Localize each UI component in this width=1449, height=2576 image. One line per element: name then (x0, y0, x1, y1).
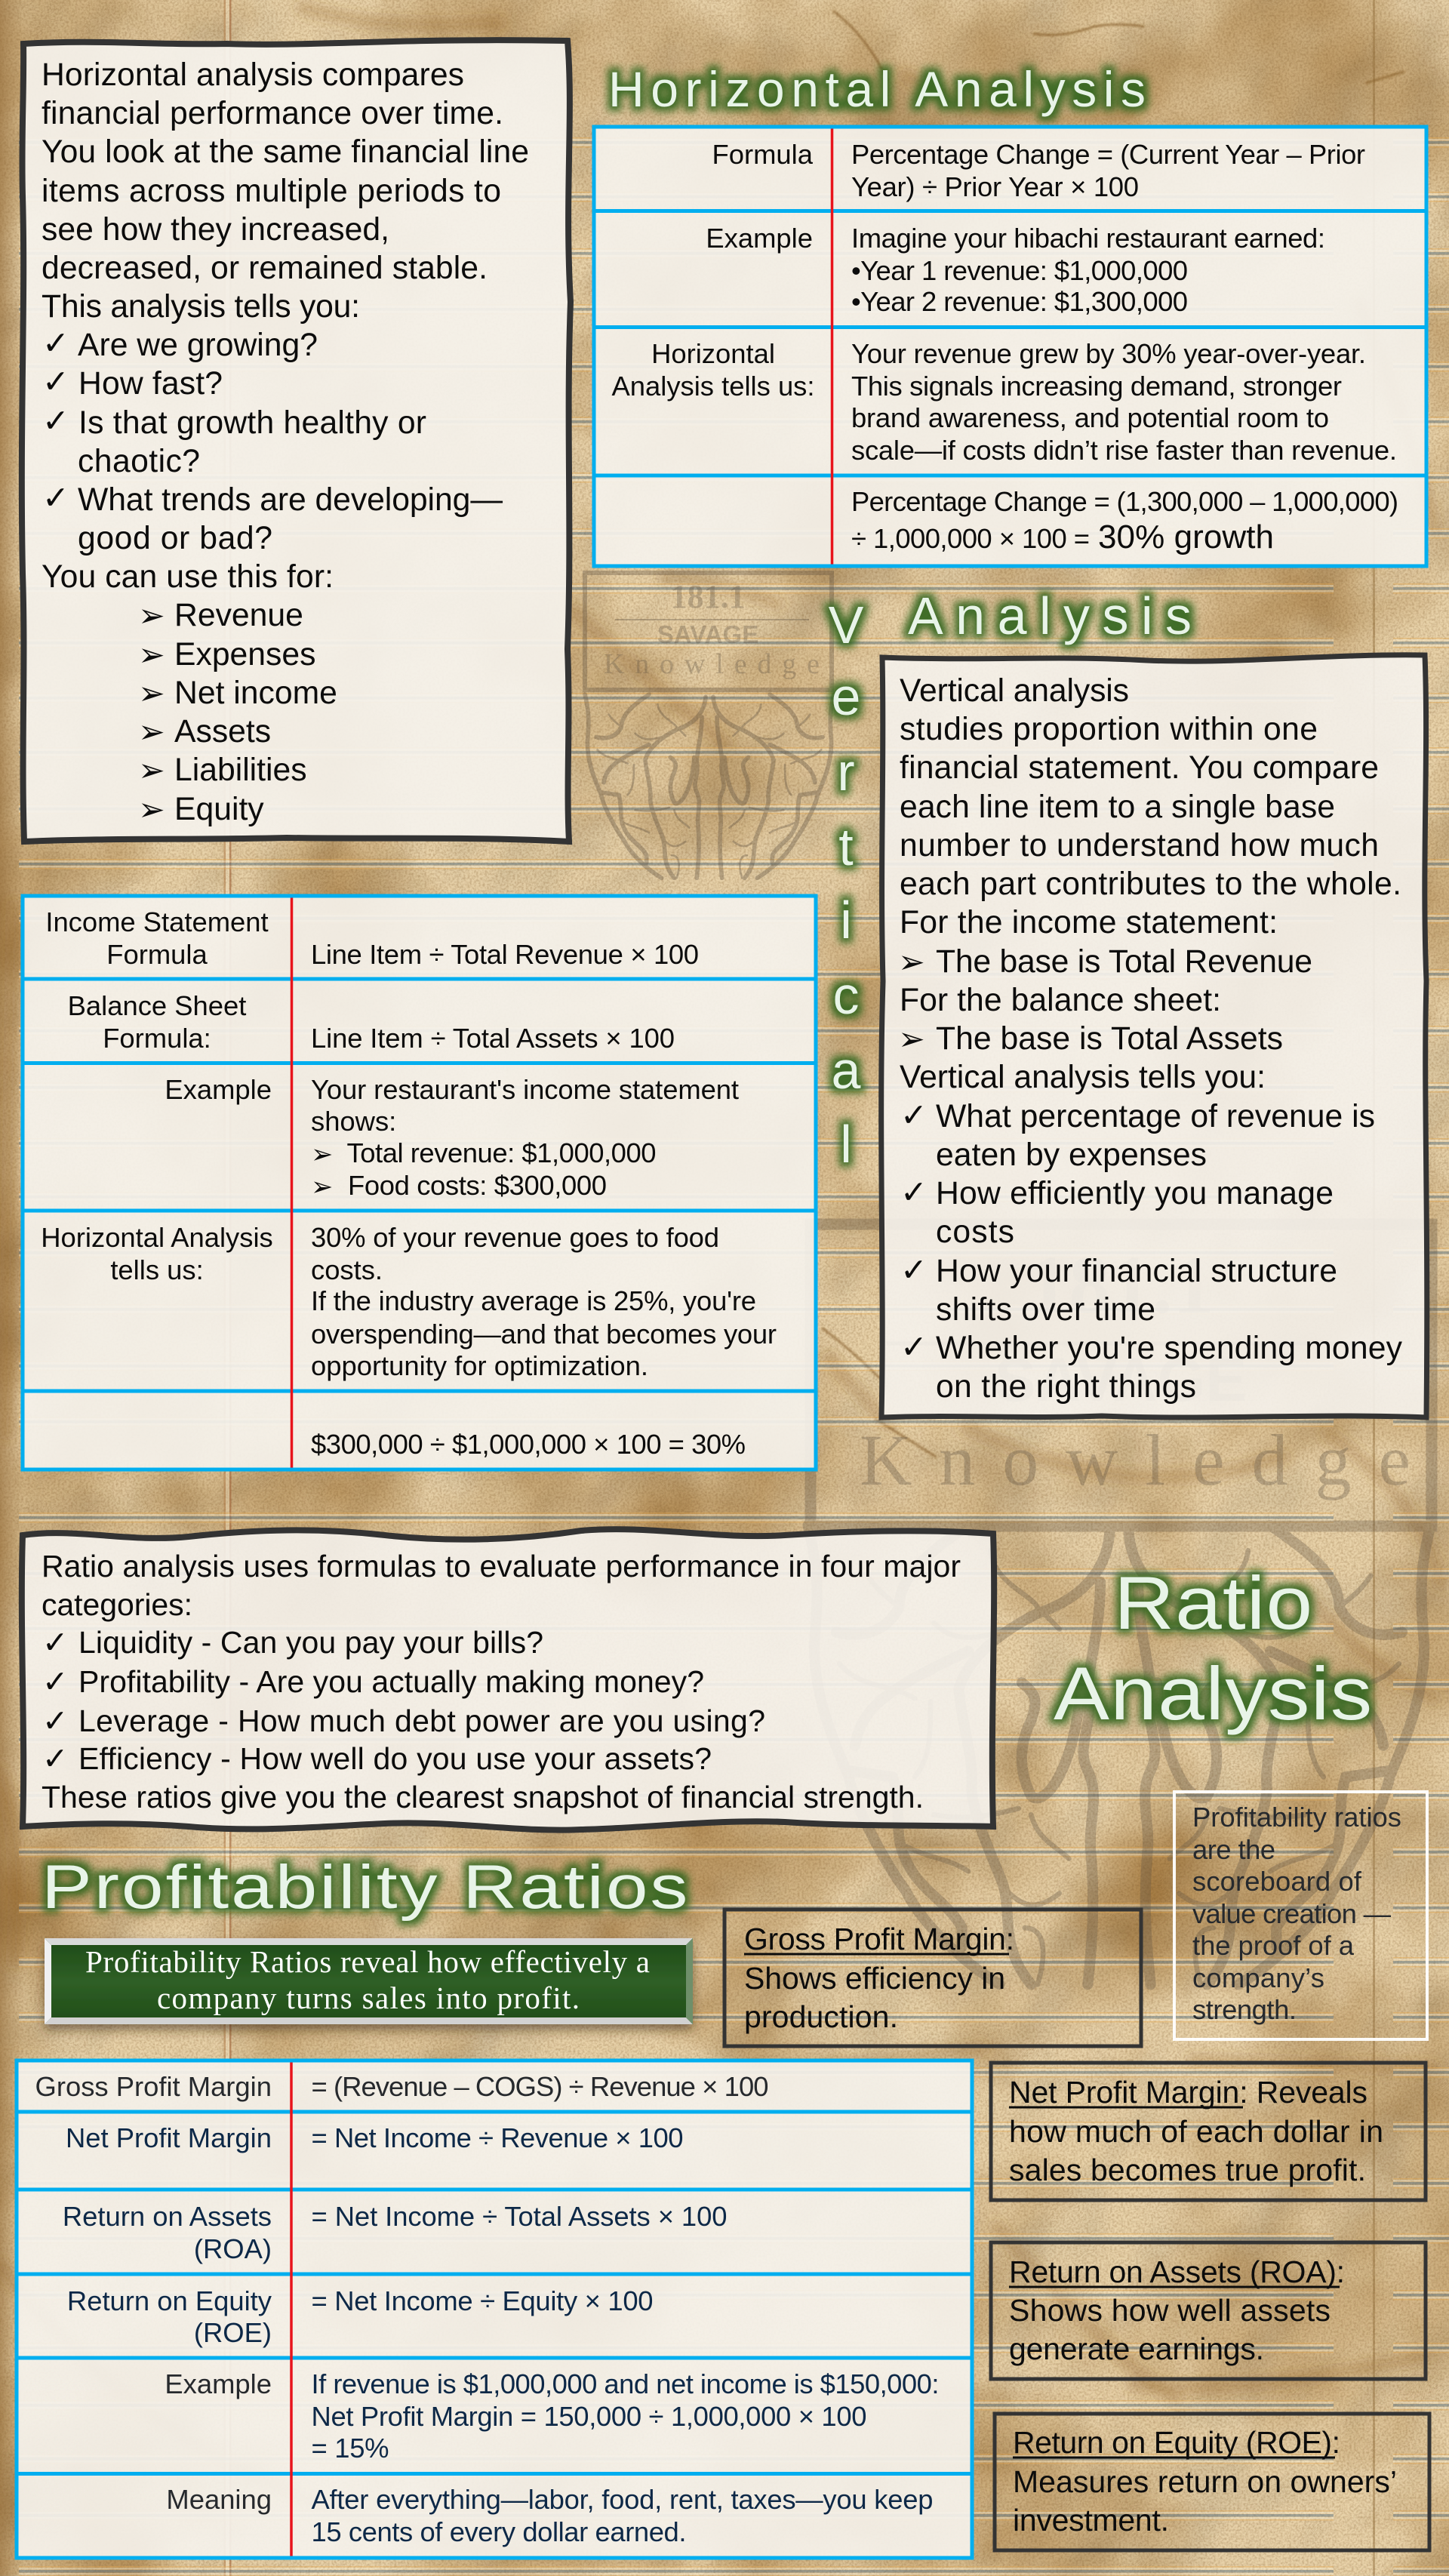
table: horizontal analysis: Example (706, 223, 813, 254)
table: vertical analysis: Formula (106, 939, 208, 970)
panel: horizontal analysis intro: decreased, or remained stable. (42, 250, 488, 286)
table: profitability ratio formulas: If revenue is $1,000,000 and net income is $150,000: (311, 2368, 939, 2399)
heading: vertical analysis (stacked letters): c (833, 966, 859, 1025)
table: vertical analysis: Income Statement (45, 906, 269, 937)
heading: ratio analysis (1054, 1562, 1372, 1736)
watermark: large savage knowledge logo: 181.1 (1027, 1239, 1214, 1331)
panel: vertical analysis text: on the right things (936, 1368, 1196, 1405)
table: vertical analysis: ➢ (311, 1140, 333, 1170)
callout: profitability ratios scoreboard: the proof of a (1192, 1930, 1355, 1961)
table: vertical analysis: ➢ (311, 1172, 333, 1202)
panel: vertical analysis text: Whether you're spending money (936, 1330, 1403, 1366)
panel: horizontal analysis intro: items across multiple periods to (42, 173, 501, 209)
watermark: small savage knowledge logo (585, 573, 834, 878)
panel: ratio analysis text: Efficiency - How well do you use your assets? (78, 1741, 712, 1776)
panel: vertical analysis text: Vertical analysis (900, 672, 1129, 709)
panel: vertical analysis text: The base is Total Revenue (936, 943, 1312, 980)
table: vertical analysis: 30% of your revenue goes to food (311, 1222, 719, 1253)
panel: horizontal analysis intro: good or bad? (78, 520, 272, 556)
panel: horizontal analysis intro: ✓ (42, 363, 69, 401)
panel: vertical analysis text: each line item to a single base (900, 789, 1335, 825)
panel: vertical analysis text: For the income statement: (900, 904, 1278, 940)
table: horizontal analysis: ÷ 1,000,000 × 100 = (851, 523, 1090, 554)
table: horizontal analysis: Year) ÷ Prior Year × 100 (851, 171, 1139, 202)
panel: ratio analysis text: Liquidity - Can you pay your bills? (78, 1625, 543, 1660)
table: vertical analysis: shows: (311, 1106, 396, 1137)
panel: horizontal analysis intro: Equity (174, 791, 264, 827)
panel: horizontal analysis intro (22, 40, 571, 842)
table: profitability ratio formulas: Return on Assets (63, 2201, 272, 2232)
table: horizontal analysis: Imagine your hibachi restaurant earned: (851, 223, 1325, 254)
table: profitability ratio formulas: = 15% (311, 2433, 389, 2464)
panel: horizontal analysis intro: Assets (174, 713, 271, 749)
panel: ratio analysis text: ✓ (42, 1624, 68, 1660)
table: vertical analysis: Horizontal Analysis (41, 1222, 273, 1253)
panel: ratio analysis text: categories: (42, 1587, 192, 1622)
heading: vertical analysis (stacked letters): a (832, 1041, 861, 1100)
table: vertical analysis: Your restaurant's income statement (311, 1074, 739, 1105)
panel: vertical analysis text (881, 655, 1427, 1417)
callout: return on equity (995, 2414, 1429, 2550)
table: vertical analysis: costs. (311, 1254, 383, 1285)
panel: horizontal analysis intro: see how they increased, (42, 211, 389, 248)
table: vertical analysis: opportunity for optimization. (311, 1350, 648, 1381)
panel: vertical analysis text: ➢ (898, 943, 925, 981)
panel: vertical analysis text: The base is Total Assets (936, 1020, 1283, 1057)
panel: vertical analysis text: studies proportion within one (900, 711, 1318, 747)
panel: ratio analysis text: Ratio analysis uses formulas to evaluate performance in four major (42, 1549, 961, 1583)
callout: return on equity: Return on Equity (ROE): (1013, 2425, 1340, 2460)
panel: horizontal analysis intro: Liabilities (174, 752, 307, 788)
callout: return on assets: Return on Assets (ROA): (1009, 2254, 1345, 2289)
callout: net profit margin: Net Profit Margin: Reveals (1009, 2075, 1367, 2110)
table: horizontal analysis: scale—if costs didn’t rise faster than revenue. (851, 435, 1397, 466)
callout: return on assets (991, 2242, 1426, 2379)
panel: horizontal analysis intro: You look at the same financial line (42, 134, 529, 170)
panel: vertical analysis text: each part contributes to the whole. (900, 866, 1401, 902)
table: profitability ratio formulas: (ROA) (194, 2233, 272, 2264)
heading: horizontal analysis: Horizontal Analysis (608, 61, 1146, 117)
table: profitability ratio formulas (17, 2060, 972, 2558)
panel: vertical analysis text: ➢ (898, 1020, 925, 1058)
heading: vertical analysis (stacked letters) (829, 586, 1192, 1174)
panel: ratio analysis text: Profitability - Are you actually making money? (78, 1664, 704, 1699)
watermark: small savage knowledge logo: SAVAGE (657, 620, 758, 648)
panel: horizontal analysis intro: Horizontal analysis compares (42, 57, 464, 93)
callout: gross profit margin (724, 1910, 1141, 2046)
table: vertical analysis: Line Item ÷ Total Revenue × 100 (311, 939, 699, 970)
table: horizontal analysis (594, 127, 1426, 566)
heading: vertical analysis (stacked letters): r (837, 743, 855, 802)
panel: horizontal analysis intro: Are we growing? (78, 327, 318, 363)
callout: net profit margin: how much of each dollar in (1009, 2114, 1383, 2149)
panel: vertical analysis text: shifts over time (936, 1291, 1155, 1328)
table: profitability ratio formulas: Return on Equity (67, 2285, 272, 2316)
table: vertical analysis (23, 896, 816, 1470)
table: horizontal analysis: Your revenue grew by 30% year-over-year. (851, 338, 1366, 369)
table: profitability ratio formulas: Meaning (166, 2484, 272, 2515)
panel: vertical analysis text: How efficiently you manage (936, 1175, 1334, 1211)
panel: vertical analysis text: Vertical analysis tells you: (900, 1059, 1266, 1095)
callout: profitability ratios scoreboard: company’s (1192, 1962, 1324, 1993)
panel: vertical analysis text: For the balance sheet: (900, 982, 1221, 1018)
callout: profitability ratios scoreboard: scoreboard of (1192, 1866, 1362, 1897)
panel: horizontal analysis intro: ✓ (42, 325, 69, 362)
panel: horizontal analysis intro: Revenue (174, 597, 303, 633)
callout: gross profit margin: Gross Profit Margin: (744, 1922, 1014, 1956)
panel: horizontal analysis intro: ➢ (138, 791, 165, 829)
table: horizontal analysis: 30% growth (1098, 519, 1274, 556)
callout: profitability ratios scoreboard (1174, 1792, 1427, 2039)
panel: ratio analysis text: ✓ (42, 1740, 68, 1777)
panel: horizontal analysis intro: You can use this for: (42, 559, 334, 595)
watermark: large savage knowledge logo: SAVAGE (995, 1346, 1247, 1414)
callout: return on equity: Measures return on owners’ (1013, 2464, 1397, 2499)
panel: vertical analysis text: ✓ (900, 1174, 928, 1211)
table: profitability ratio formulas: Net Profit Margin = 150,000 ÷ 1,000,000 × 100 (311, 2401, 866, 2432)
callout: return on assets: generate earnings. (1009, 2331, 1264, 2366)
table: vertical analysis: tells us: (110, 1254, 204, 1285)
table: profitability ratio formulas: Gross Profit Margin (35, 2071, 272, 2102)
table: vertical analysis: If the industry average is 25%, you're (311, 1285, 756, 1316)
table: horizontal analysis: This signals increasing demand, stronger (851, 371, 1342, 402)
table: horizontal analysis: brand awareness, and potential room to (851, 402, 1329, 433)
heading: vertical analysis (stacked letters): Analysis (908, 586, 1192, 645)
panel: horizontal analysis intro: Net income (174, 675, 337, 711)
table: vertical analysis: Formula: (103, 1023, 211, 1054)
panel: horizontal analysis intro: How fast? (78, 365, 223, 402)
callout: gross profit margin: Shows efficiency in (744, 1961, 1005, 1996)
callout: net profit margin (991, 2063, 1426, 2200)
panel: horizontal analysis intro: Expenses (174, 636, 315, 672)
table: horizontal analysis: •Year 1 revenue: $1,000,000 (851, 255, 1188, 286)
heading: vertical analysis (stacked letters): e (832, 667, 860, 726)
watermark: small savage knowledge logo: 181.1 (670, 578, 746, 615)
table: horizontal analysis: Analysis tells us: (611, 371, 815, 402)
panel: horizontal analysis intro: ✓ (42, 402, 69, 440)
panel: horizontal analysis intro: This analysis tells you: (42, 288, 360, 325)
panel: vertical analysis text: How your financial structure (936, 1253, 1337, 1289)
table: vertical analysis: Food costs: $300,000 (348, 1170, 607, 1201)
table: horizontal analysis: Formula (712, 139, 814, 170)
table: profitability ratio formulas: = Net Income ÷ Equity × 100 (311, 2285, 654, 2316)
table: profitability ratio formulas: Example (165, 2368, 272, 2399)
panel: horizontal analysis intro: ➢ (138, 752, 165, 789)
panel: ratio analysis text: ✓ (42, 1703, 68, 1739)
heading: vertical analysis (stacked letters): t (838, 817, 854, 876)
panel: vertical analysis text: eaten by expenses (936, 1137, 1207, 1173)
table: profitability ratio formulas: = (Revenue – COGS) ÷ Revenue × 100 (311, 2071, 768, 2102)
table: horizontal analysis: Percentage Change = (Current Year – Prior (851, 139, 1365, 170)
heading: ratio analysis: Analysis (1054, 1652, 1372, 1736)
callout: net profit margin: sales becomes true profit. (1009, 2153, 1366, 2187)
callout: profitability ratios scoreboard: value creation — (1192, 1898, 1392, 1929)
panel: vertical analysis text: financial statement. You compare (900, 749, 1379, 786)
banner: profitability ratios definition (45, 1938, 693, 2024)
panel: horizontal analysis intro: ➢ (138, 675, 165, 712)
panel: horizontal analysis intro: ➢ (138, 597, 165, 635)
table: horizontal analysis: Percentage Change = (1,300,000 – 1,000,000) (851, 486, 1398, 517)
table: vertical analysis: Balance Sheet (68, 990, 246, 1021)
panel: horizontal analysis intro: ➢ (138, 713, 165, 751)
panel: vertical analysis text: number to understand how much (900, 827, 1379, 863)
table: horizontal analysis: •Year 2 revenue: $1,300,000 (851, 286, 1188, 317)
table: profitability ratio formulas: = Net Income ÷ Revenue × 100 (311, 2122, 684, 2153)
heading: vertical analysis (stacked letters): V (829, 596, 864, 654)
table: horizontal analysis: Horizontal (651, 338, 775, 369)
panel: vertical analysis text: costs (936, 1214, 1014, 1250)
panel: horizontal analysis intro: financial performance over time. (42, 95, 503, 131)
panel: ratio analysis text (22, 1529, 994, 1830)
banner: profitability ratios definition: company turns sales into profit. (157, 1980, 580, 2015)
table: vertical analysis: Total revenue: $1,000,000 (347, 1137, 657, 1168)
panel: vertical analysis text: ✓ (900, 1251, 928, 1289)
table: profitability ratio formulas: 15 cents of every dollar earned. (311, 2516, 687, 2547)
heading: ratio analysis: Ratio (1114, 1562, 1312, 1645)
heading: vertical analysis (stacked letters): l (840, 1115, 852, 1174)
table: vertical analysis: Example (165, 1074, 272, 1105)
table: vertical analysis: Line Item ÷ Total Assets × 100 (311, 1023, 675, 1054)
panel: vertical analysis text: ✓ (900, 1097, 928, 1134)
heading: profitability ratios: Profitability Ratios (42, 1852, 688, 1922)
callout: profitability ratios scoreboard: are the (1192, 1834, 1275, 1865)
callout: gross profit margin: production. (744, 1999, 898, 2034)
callout: profitability ratios scoreboard: Profitability ratios (1192, 1802, 1401, 1833)
watermark: large savage knowledge logo: Knowledge (860, 1420, 1411, 1500)
watermark: large savage knowledge logo (808, 1224, 1432, 1984)
panel: vertical analysis text: What percentage of revenue is (936, 1098, 1375, 1134)
panel: horizontal analysis intro: chaotic? (78, 443, 200, 479)
panel: vertical analysis text: ✓ (900, 1328, 928, 1366)
callout: profitability ratios scoreboard: strength. (1192, 1994, 1297, 2025)
callout: return on assets: Shows how well assets (1009, 2293, 1331, 2328)
callout: return on equity: investment. (1013, 2503, 1169, 2538)
table: profitability ratio formulas: Net Profit Margin (66, 2122, 272, 2153)
table: vertical analysis: overspending—and that becomes your (311, 1319, 777, 1350)
panel: ratio analysis text: These ratios give you the clearest snapshot of financial strength. (42, 1780, 924, 1814)
table: profitability ratio formulas: (ROE) (194, 2317, 272, 2348)
watermark: small savage knowledge logo: Knowledge (604, 648, 820, 680)
panel: horizontal analysis intro: ✓ (42, 479, 69, 517)
heading: vertical analysis (stacked letters): i (840, 891, 852, 949)
panel: horizontal analysis intro: Is that growth healthy or (78, 405, 426, 441)
panel: ratio analysis text: Leverage - How much debt power are you using? (78, 1703, 765, 1738)
banner: profitability ratios definition: Profitability Ratios reveal how effectively a (85, 1944, 650, 1979)
panel: horizontal analysis intro: What trends are developing— (78, 482, 503, 518)
table: vertical analysis: $300,000 ÷ $1,000,000 × 100 = 30% (311, 1429, 746, 1460)
panel: ratio analysis text: ✓ (42, 1663, 68, 1700)
table: profitability ratio formulas: After everything—labor, food, rent, taxes—you keep (311, 2484, 933, 2515)
table: profitability ratio formulas: = Net Income ÷ Total Assets × 100 (311, 2201, 728, 2232)
panel: horizontal analysis intro: ➢ (138, 636, 165, 674)
